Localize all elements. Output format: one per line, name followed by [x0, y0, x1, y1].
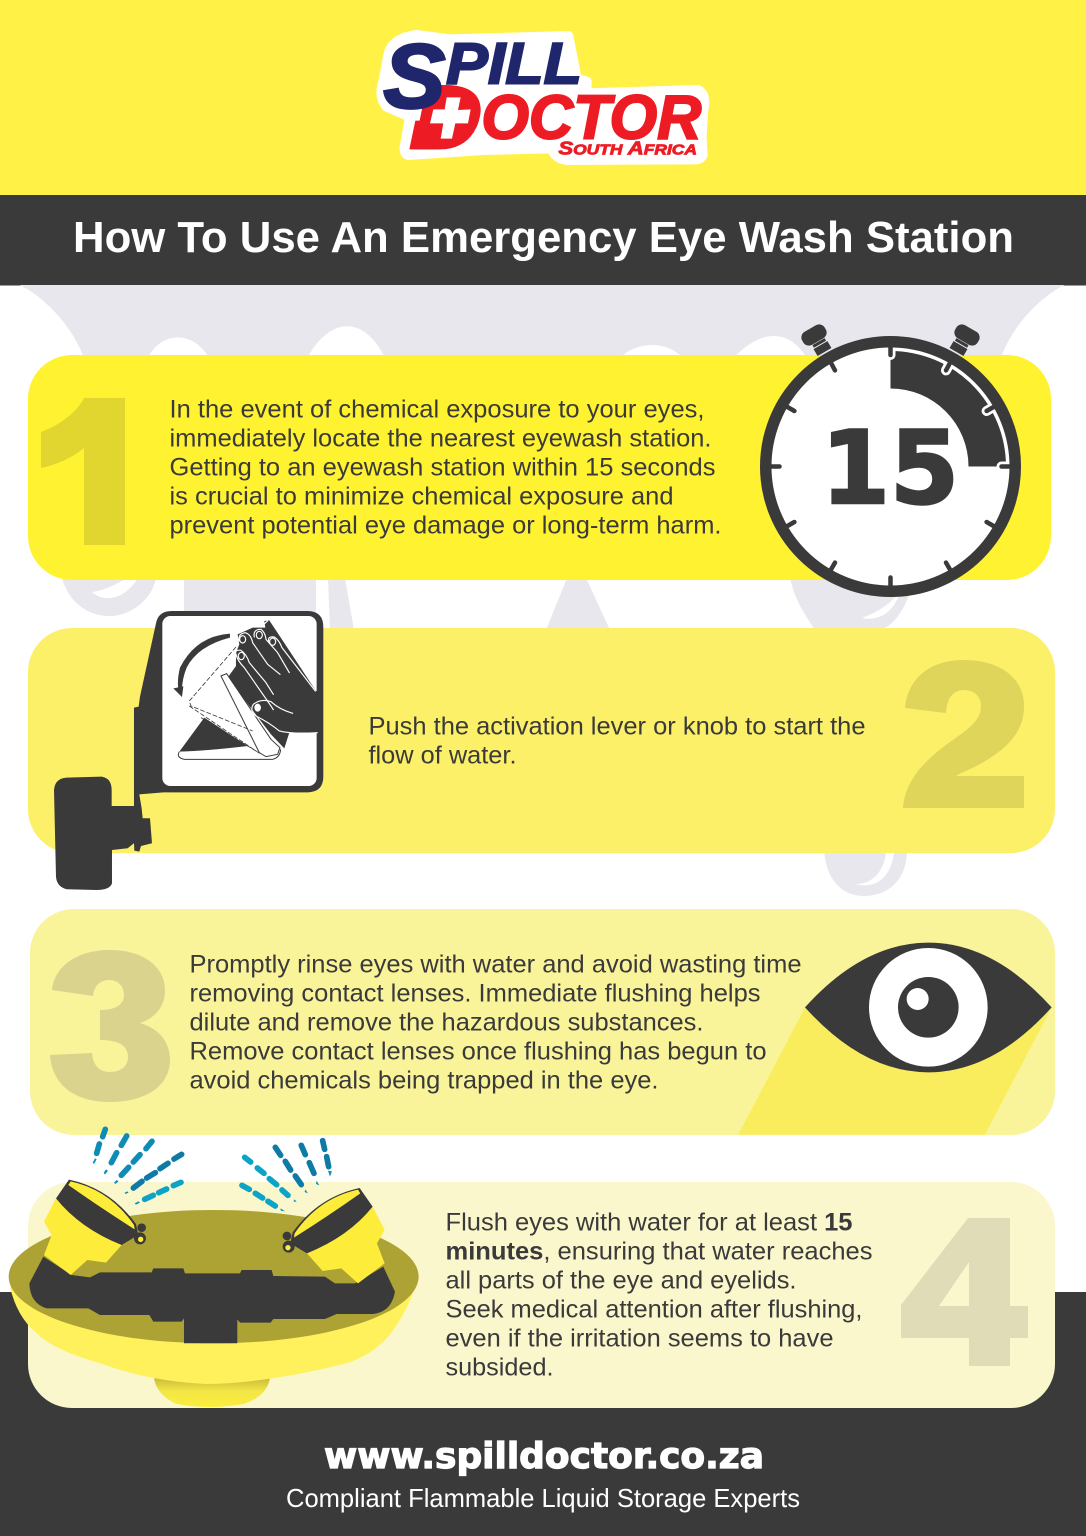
- step 3 text: [190, 951, 802, 1095]
- icon: eye: [738, 943, 1052, 1135]
- step 3 text: removing contact lenses. Immediate flushing helps: [190, 980, 760, 1008]
- hand pressing lever: [173, 620, 317, 759]
- logo: S: [383, 27, 445, 128]
- panel 4: flush eyes: [28, 1182, 1055, 1408]
- step 3 text: Promptly rinse eyes with water and avoid wasting time: [190, 951, 802, 979]
- water spray: [97, 1129, 329, 1206]
- step 4 text: [446, 1209, 872, 1382]
- title: How To Use An Emergency Eye Wash Station: [73, 213, 1014, 262]
- icon: eye wash basin with nozzles and water spray: [9, 1129, 419, 1407]
- 15: 15: [821, 409, 959, 527]
- step 4 text: Flush eyes with water for at least 15: [446, 1209, 853, 1237]
- step 1 text: In the event of chemical exposure to your eyes,: [170, 396, 704, 424]
- step 3 text: dilute and remove the hazardous substances.: [190, 1009, 704, 1037]
- right nozzle: [283, 1188, 385, 1283]
- footer band background: [0, 1292, 1086, 1536]
- left nozzle: [44, 1180, 146, 1275]
- step 1 text: Getting to an eyewash station within 15 seconds: [170, 454, 716, 482]
- title band: [0, 195, 1086, 286]
- step 4 text: all parts of the eye and eyelids.: [446, 1267, 796, 1295]
- number 1: [41, 398, 125, 545]
- panel 1: locate the station: [28, 355, 1051, 580]
- step 2 text: flow of water.: [368, 742, 516, 770]
- logo: OCTOR: [481, 84, 702, 153]
- step 4 text: even if the irritation seems to have: [446, 1325, 834, 1353]
- step 1 text: is crucial to minimize chemical exposure and: [170, 483, 674, 511]
- step 4 text: Seek medical attention after flushing,: [446, 1296, 862, 1324]
- step 1 text: prevent potential eye damage or long-term harm.: [170, 512, 722, 540]
- panel 3: rinse eyes: [30, 909, 1055, 1135]
- step 3 text: avoid chemicals being trapped in the eye.: [190, 1067, 658, 1095]
- number 3: [50, 950, 170, 1102]
- step 2 text: [368, 713, 866, 770]
- panel 2: push the lever: [28, 628, 1055, 853]
- number 4: [901, 1218, 1028, 1366]
- step 1 text: immediately locate the nearest eyewash station.: [170, 425, 712, 453]
- website: www.spilldoctor.co.za: [324, 1436, 764, 1477]
- header band: [0, 0, 1086, 195]
- pipes: [29, 1257, 395, 1343]
- logo: PILL: [446, 31, 582, 96]
- step 2 text: Push the activation lever or knob to start the: [368, 713, 866, 741]
- step 3 text: Remove contact lenses once flushing has begun to: [190, 1038, 766, 1066]
- step 4 text: minutes, ensuring that water reaches: [446, 1238, 872, 1266]
- basin interior: [9, 1210, 419, 1343]
- basin foot: [154, 1378, 270, 1407]
- basin outer: [10, 1277, 419, 1384]
- icon: activation lever with hand: [54, 611, 323, 890]
- step 4 text: subsided.: [446, 1354, 554, 1382]
- step 1 text: [170, 396, 722, 540]
- logo: D: [413, 68, 480, 167]
- icon: stopwatch 15 seconds: [766, 322, 1015, 591]
- footer: [286, 1436, 800, 1513]
- number 2: [903, 660, 1024, 808]
- logo: [381, 27, 704, 167]
- tagline: Compliant Flammable Liquid Storage Experts: [286, 1483, 800, 1513]
- logo: SOUTH AFRICA: [558, 137, 697, 158]
- background: grey paint drips: [20, 285, 1064, 896]
